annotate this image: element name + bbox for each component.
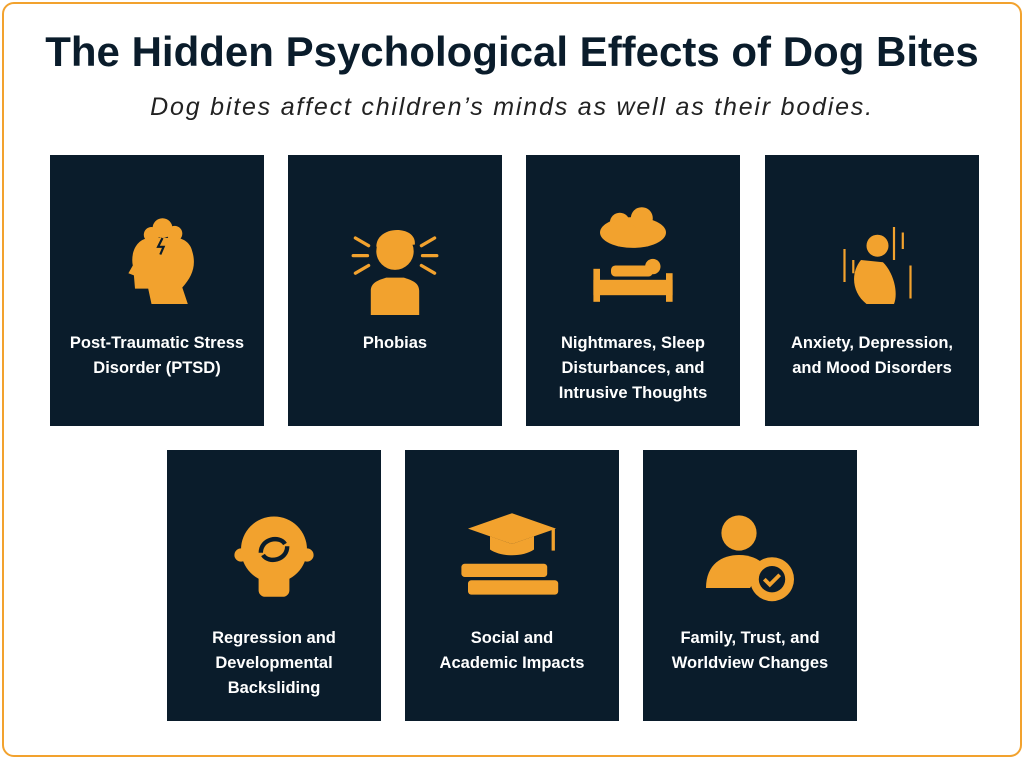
card: Social and Academic [405,450,619,721]
label [212,629,336,697]
label [70,334,244,377]
icon: distressed person [352,230,438,315]
label: Nightmares, Sleep [561,334,705,352]
label [672,629,828,672]
label [791,334,953,377]
label: Social and [471,629,553,647]
label: Developmental [215,654,333,672]
card: Regression [167,450,381,721]
label: Post-Traumatic Stress [70,334,244,352]
icon: books and cap [461,513,558,595]
card: Nightmares [526,155,740,426]
label: Intrusive Thoughts [559,384,707,402]
label: Worldview Changes [672,654,828,672]
label: Anxiety, Depression, [791,334,953,352]
label: Family, Trust, and [680,629,820,647]
label: Regression and [212,629,336,647]
label: Backsliding [228,679,320,697]
label: and Mood Disorders [792,359,952,377]
label: Phobias [363,334,427,352]
card: Family [643,450,857,721]
icon: bed with cloud [593,207,673,302]
icon: person with badge [706,515,794,602]
label: Disorder (PTSD) [93,359,221,377]
card: Anxiety [765,155,979,426]
label [559,334,707,402]
card: Phobias [288,155,502,426]
subtitle: Dog bites affect children’s minds as well as their bodies. [150,93,874,121]
icon: head with storm [128,218,194,304]
icon: sitting figure [843,227,912,304]
title: The Hidden Psychological Effects of Dog Bites [45,28,979,75]
label: Disturbances, and [561,359,705,377]
icon: head with swirl [234,516,314,597]
card: PTSD [50,155,264,426]
label: Academic Impacts [440,654,584,672]
label [440,629,584,672]
